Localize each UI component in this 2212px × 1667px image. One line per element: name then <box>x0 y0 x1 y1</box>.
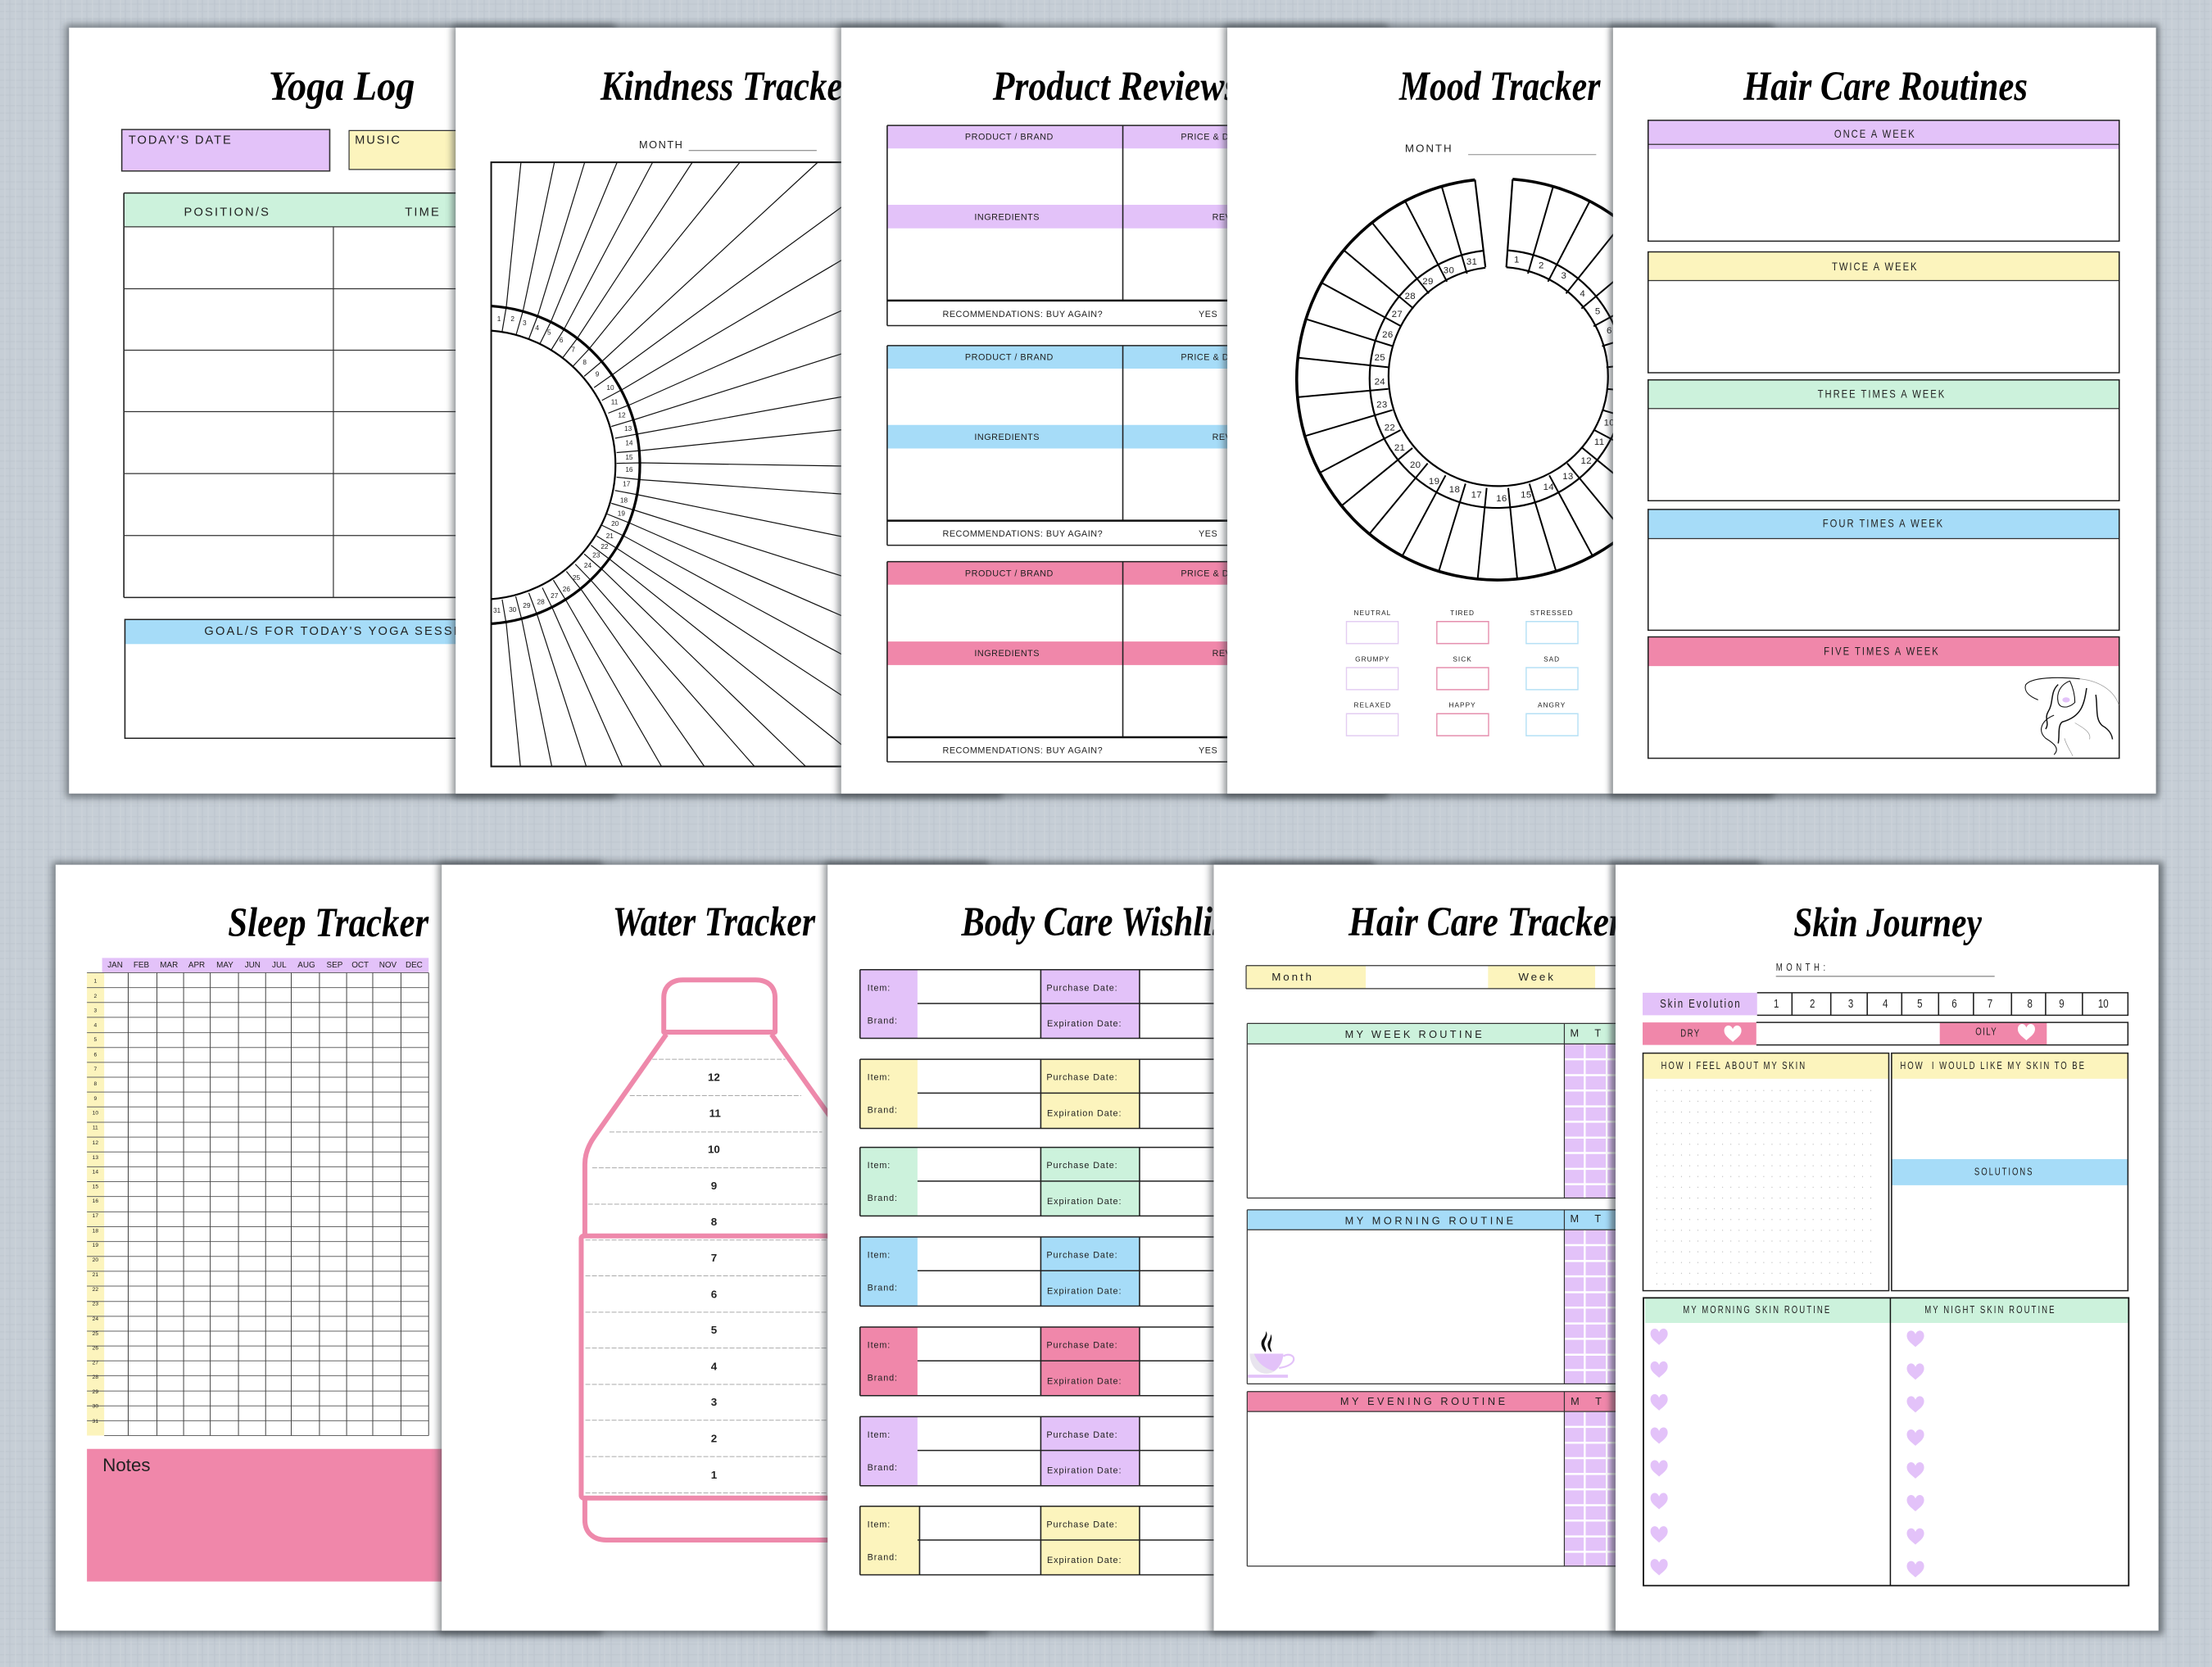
review block: pink: PRODUCT / BRAND <box>965 569 1054 579</box>
chart: monthly sleep grid: 11 <box>93 1126 98 1131</box>
routine: three times a week <box>1648 380 2119 501</box>
panel: session goals <box>125 619 553 738</box>
chart: circular mood wheel: 29 <box>1422 277 1434 287</box>
title: Sleep Tracker <box>228 900 429 946</box>
chart: day ring: 20 <box>611 520 619 528</box>
chart: monthly sleep grid: 2 <box>93 994 97 999</box>
chart: circular mood wheel: 20 <box>1410 460 1421 470</box>
wishlist row: blue: Purchase Date: <box>1046 1251 1118 1261</box>
chart: day ring: 6 <box>560 337 564 344</box>
chart: monthly sleep grid: JAN <box>107 961 123 970</box>
section: my morning routine: T <box>1594 1213 1602 1225</box>
review block: purple: REVIEW <box>1213 213 1250 223</box>
scale: skin evolution: 10 <box>2098 997 2109 1010</box>
chart: water bottle: 12 <box>708 1071 720 1083</box>
scale: skin evolution: Skin Evolution <box>1660 997 1742 1010</box>
page: Water Tracker <box>438 862 988 1635</box>
chart: day ring: 12 <box>618 411 626 419</box>
chart: day ring: 28 <box>537 599 545 605</box>
chart: day ring: 8 <box>582 359 587 366</box>
chart: day ring: 25 <box>573 574 581 582</box>
page: Mood Tracker <box>1224 25 1774 798</box>
chart: monthly sleep grid <box>87 958 428 1435</box>
review block: pink <box>887 562 1358 762</box>
wishlist row: pink: Brand: <box>868 1374 898 1384</box>
chart: monthly sleep grid: JUL <box>272 961 287 970</box>
panel: how I would like my skin to be, solutions: HOW I WOULD LIKE MY SKIN TO BE <box>1900 1061 2086 1071</box>
scale: dry to oily: DRY <box>1680 1029 1701 1040</box>
review block: blue: INGREDIENTS <box>974 433 1040 442</box>
chart: monthly sleep grid: 25 <box>93 1331 98 1337</box>
chart: monthly sleep grid: 23 <box>93 1302 98 1307</box>
chart: monthly sleep grid: 6 <box>93 1052 97 1058</box>
chart: monthly sleep grid: 7 <box>93 1067 97 1072</box>
title: Mood Tracker <box>1398 63 1601 110</box>
chart: circular mood wheel: 9 <box>1613 396 1619 406</box>
review block: blue <box>887 346 1358 546</box>
chart: circular mood wheel: 3 <box>1561 271 1566 281</box>
chart: monthly sleep grid: MAR <box>160 961 178 970</box>
review block: purple: PRICE & DATE <box>1181 133 1247 143</box>
chart: circular mood wheel: 30 <box>1444 266 1454 276</box>
chart frame <box>492 162 904 767</box>
field: music <box>349 130 558 170</box>
chart: day ring: 13 <box>624 425 632 433</box>
wishlist row: purple second: Expiration Date: <box>1047 1466 1122 1476</box>
chart: circular mood wheel: 14 <box>1543 482 1554 492</box>
chart: circular mood wheel: 4 <box>1580 289 1585 299</box>
chart: monthly sleep grid: OCT <box>351 961 369 970</box>
scale: skin evolution: 1 <box>1774 997 1779 1010</box>
routine: four times a week <box>1648 510 2119 630</box>
wishlist row: yellow second <box>860 1506 1330 1574</box>
section: my evening routine: MY EVENING ROUTINE <box>1340 1396 1508 1407</box>
scale: skin evolution: 7 <box>1988 997 1992 1010</box>
chart: day ring: 7 <box>571 346 575 353</box>
review block: purple: RECOMMENDATIONS: BUY AGAIN? <box>943 310 1103 319</box>
wishlist row: green: Expiration Date: <box>1047 1197 1122 1207</box>
routine: once a week: ONCE A WEEK <box>1834 128 1916 140</box>
chart: monthly sleep grid: NOV <box>379 961 397 970</box>
page: Sleep Tracker <box>52 862 602 1635</box>
review block: pink: REVIEW <box>1213 649 1250 659</box>
review block: pink: INGREDIENTS <box>974 649 1040 659</box>
routine: five times a week <box>1648 637 2119 759</box>
chart: circular mood wheel: 17 <box>1471 491 1482 500</box>
icons: night hearts <box>1907 1330 1924 1578</box>
chart: circular mood wheel: 12 <box>1581 456 1592 466</box>
review block: purple: PRODUCT / BRAND <box>965 133 1054 143</box>
wishlist row: purple: Expiration Date: <box>1047 1019 1122 1029</box>
section: my morning routine: MY MORNING ROUTINE <box>1345 1215 1516 1226</box>
scale: skin evolution: 3 <box>1848 997 1853 1010</box>
title: Body Care Wishlist <box>961 899 1237 945</box>
chart: monthly sleep grid: 10 <box>93 1111 98 1117</box>
wishlist row: yellow: Purchase Date: <box>1046 1073 1118 1083</box>
chart: water bottle: 1 <box>711 1469 717 1481</box>
chart: monthly sleep grid: 13 <box>93 1155 98 1161</box>
chart: day ring: 31 <box>493 607 501 614</box>
chart: day ring: 18 <box>620 497 628 505</box>
chart: day ring: 11 <box>611 399 619 406</box>
chart: water bottle: 9 <box>711 1180 717 1192</box>
chart: circular mood wheel: 25 <box>1375 353 1385 363</box>
chart: circular mood wheel: 24 <box>1375 377 1385 387</box>
title: Skin Journey <box>1793 899 1983 945</box>
legend: moods: HAPPY <box>1449 702 1476 709</box>
legend: moods: STRESSED <box>1530 609 1574 617</box>
panel: how I feel about my skin <box>1643 1053 1889 1291</box>
chart: day ring: 3 <box>523 319 527 327</box>
page: Product Reviews <box>838 25 1388 798</box>
wishlist row: purple: Brand: <box>868 1016 898 1026</box>
wishlist row: pink: Expiration Date: <box>1047 1376 1122 1386</box>
title: Hair Care Tracker <box>1348 899 1624 945</box>
icon: woman with hat line art <box>2025 677 2119 756</box>
wishlist row: purple second: Purchase Date: <box>1046 1430 1118 1440</box>
panel: notes <box>87 1449 557 1582</box>
routine: four times a week: FOUR TIMES A WEEK <box>1823 518 1944 530</box>
chart: water bottle: 3 <box>711 1396 717 1408</box>
legend: moods: SICK <box>1453 656 1472 663</box>
chart: monthly sleep grid: 27 <box>93 1361 98 1366</box>
chart: monthly sleep grid: 14 <box>93 1170 98 1175</box>
section: my evening routine: M <box>1571 1396 1580 1407</box>
table: positions and time <box>124 193 552 597</box>
chart: day ring: 9 <box>596 370 600 378</box>
month field: MONTH <box>1405 143 1453 155</box>
review block: purple: INGREDIENTS <box>974 213 1040 223</box>
chart: day ring <box>492 306 640 623</box>
section: my morning routine <box>1247 1210 1681 1384</box>
chart: day ring: 23 <box>592 552 601 559</box>
scale: skin evolution: 8 <box>2028 997 2033 1010</box>
chart: monthly sleep grid: 31 <box>93 1419 98 1425</box>
chart: water bottle: 2 <box>711 1433 717 1445</box>
legend: moods <box>1346 609 1578 736</box>
panel: skin routines: MY NIGHT SKIN ROUTINE <box>1924 1305 2056 1316</box>
wishlist row: purple second: Brand: <box>868 1463 898 1473</box>
page: Body Care Wishlist <box>824 862 1374 1635</box>
field: today's date <box>122 129 329 171</box>
review block: pink: YES <box>1199 745 1217 755</box>
section: my week routine <box>1247 1023 1681 1198</box>
chart: monthly sleep grid: 9 <box>93 1096 97 1102</box>
chart: day ring: 26 <box>563 586 570 593</box>
icon: steaming cup <box>1248 1331 1294 1378</box>
panel: how I feel about my skin: HOW I FEEL ABOUT MY SKIN <box>1661 1061 1806 1071</box>
chart: water bottle: 8 <box>711 1216 717 1228</box>
chart: day ring: 27 <box>551 592 559 600</box>
wishlist row: blue <box>860 1237 1330 1306</box>
month and week bar <box>1246 966 1718 989</box>
chart: monthly sleep grid: 16 <box>93 1198 98 1204</box>
wishlist row: purple: Purchase Date: <box>1046 983 1118 993</box>
wishlist row: yellow: Expiration Date: <box>1047 1109 1122 1118</box>
review block: pink: PRICE & DATE <box>1181 569 1247 579</box>
chart: monthly sleep grid: 19 <box>93 1243 98 1248</box>
wishlist row: blue: Expiration Date: <box>1047 1286 1122 1296</box>
chart: day ring: 19 <box>618 510 625 517</box>
chart: circular mood wheel: 5 <box>1595 307 1601 317</box>
wishlist row: pink <box>860 1327 1330 1396</box>
wishlist row: yellow second: Expiration Date: <box>1047 1556 1122 1565</box>
chart: water bottle: 4 <box>711 1361 718 1372</box>
chart: monthly sleep grid: 26 <box>93 1346 98 1351</box>
chart: circular mood wheel <box>1297 179 1698 580</box>
chart: day ring: 5 <box>547 329 551 337</box>
wishlist row: purple <box>860 970 1330 1039</box>
chart: circular mood wheel: 27 <box>1392 310 1403 319</box>
chart: monthly sleep grid: 4 <box>93 1023 97 1029</box>
routine: twice a week <box>1648 252 2119 373</box>
chart: circular mood wheel: 28 <box>1405 292 1416 301</box>
legend: moods: TIRED <box>1450 609 1475 617</box>
chart: day ring: 15 <box>625 454 633 461</box>
wishlist row: green <box>860 1148 1330 1216</box>
chart: monthly sleep grid: 17 <box>93 1213 98 1219</box>
chart: circular mood wheel: 15 <box>1521 491 1532 500</box>
chart: circular mood wheel: 22 <box>1385 424 1395 433</box>
chart: day ring: 4 <box>535 324 539 332</box>
scale: skin evolution: 6 <box>1951 997 1957 1010</box>
chart: circular mood wheel: 6 <box>1607 326 1612 336</box>
table: positions and time: POSITION/S <box>184 206 270 220</box>
chart: monthly sleep grid: 29 <box>93 1389 98 1395</box>
scale: skin evolution: 9 <box>2059 997 2065 1010</box>
wishlist row: blue: Item: <box>868 1251 891 1261</box>
chart: monthly sleep grid: SEP <box>327 961 342 970</box>
panel: session goals: GOAL/S FOR TODAY'S YOGA SESSION <box>204 625 480 638</box>
chart: monthly sleep grid: 22 <box>93 1287 98 1293</box>
review block: blue: REVIEW <box>1213 433 1250 442</box>
review block: purple: YES <box>1199 310 1217 319</box>
title: Kindness Tracker <box>600 63 857 110</box>
chart: monthly sleep grid: 28 <box>93 1375 98 1380</box>
chart: monthly sleep grid: 12 <box>93 1140 98 1146</box>
routine: once a week <box>1648 120 2119 241</box>
wishlist row: yellow second: Brand: <box>868 1552 898 1562</box>
page: Skin Journey <box>1611 862 2164 1635</box>
scale: dry to oily <box>1643 1022 2128 1045</box>
wishlist row: green: Item: <box>868 1161 891 1171</box>
legend: moods: SAD <box>1543 656 1560 663</box>
panel: skin routines: MY MORNING SKIN ROUTINE <box>1683 1305 1831 1316</box>
chart: sunburst day rays <box>502 162 864 767</box>
title: Water Tracker <box>613 899 816 945</box>
page: Kindness Tracker <box>452 25 1002 798</box>
month field: MONTH: <box>1776 963 1829 973</box>
chart: monthly sleep grid: 15 <box>93 1185 98 1190</box>
panel: skin routines <box>1643 1298 2128 1586</box>
wishlist row: yellow second: Purchase Date: <box>1046 1520 1118 1529</box>
wishlist row: yellow <box>860 1059 1330 1129</box>
chart: circular mood wheel: 10 <box>1604 418 1615 428</box>
review block: blue: RECOMMENDATIONS: BUY AGAIN? <box>943 529 1103 539</box>
chart: day ring: 1 <box>497 315 501 323</box>
section: my week routine: MY WEEK ROUTINE <box>1345 1029 1484 1040</box>
page: Hair Care Routines <box>1610 25 2160 798</box>
chart: monthly sleep grid: 30 <box>93 1404 98 1410</box>
wishlist row: purple second <box>860 1416 1330 1486</box>
chart: day ring: 16 <box>625 466 633 473</box>
wishlist row: yellow: Brand: <box>868 1106 898 1116</box>
wishlist row: purple second: Item: <box>868 1430 891 1440</box>
review block: purple <box>887 125 1358 326</box>
chart: monthly sleep grid: 21 <box>93 1272 98 1278</box>
field: music: MUSIC <box>355 134 401 147</box>
chart: day ring: 30 <box>509 606 517 614</box>
section: my evening routine <box>1247 1392 1681 1566</box>
chart: day ring: 14 <box>625 440 633 447</box>
chart: monthly sleep grid: MAY <box>216 961 233 970</box>
field: today's date: TODAY'S DATE <box>129 134 233 147</box>
routine: three times a week: THREE TIMES A WEEK <box>1818 388 1946 401</box>
chart: circular mood wheel: 23 <box>1376 401 1388 410</box>
chart: monthly sleep grid: DEC <box>406 961 423 970</box>
chart: monthly sleep grid: 5 <box>93 1037 97 1043</box>
review block: blue: PRICE & DATE <box>1181 352 1247 362</box>
scale: skin evolution: 4 <box>1883 997 1888 1010</box>
chart: circular mood wheel: 16 <box>1496 494 1507 504</box>
section: my evening routine: T <box>1595 1396 1602 1407</box>
legend: moods: RELAXED <box>1354 702 1391 709</box>
month and week bar: Month <box>1271 971 1314 983</box>
chart: monthly sleep grid: JUN <box>245 961 261 970</box>
chart: water bottle: 11 <box>709 1108 721 1120</box>
icon: lips <box>2062 697 2070 703</box>
chart: monthly sleep grid: 3 <box>93 1008 97 1014</box>
wishlist row: blue: Brand: <box>868 1284 898 1293</box>
chart: circular mood wheel: 26 <box>1382 330 1394 340</box>
month and week bar: Week <box>1518 971 1556 983</box>
scale: dry to oily: OILY <box>1975 1027 1997 1038</box>
chart: monthly sleep grid: APR <box>188 961 205 970</box>
chart: water bottle: 5 <box>711 1324 717 1336</box>
panel: notes: Notes <box>102 1455 151 1475</box>
chart: circular mood wheel: 7 <box>1613 351 1619 360</box>
chart: monthly sleep grid: 20 <box>93 1257 98 1263</box>
wishlist row: yellow second: Item: <box>868 1520 891 1529</box>
wishlist row: yellow: Item: <box>868 1073 891 1083</box>
wishlist row: green: Brand: <box>868 1194 898 1203</box>
section: my morning routine: M <box>1570 1213 1579 1225</box>
chart: monthly sleep grid: 1 <box>93 978 97 984</box>
chart: day ring: 29 <box>523 602 531 609</box>
chart: day ring: 22 <box>601 543 609 550</box>
chart: circular mood wheel: 21 <box>1394 443 1405 453</box>
scale: skin evolution <box>1643 993 2128 1015</box>
chart: day ring: 17 <box>623 481 631 488</box>
chart: circular mood wheel: 11 <box>1594 437 1604 447</box>
page: Hair Care Tracker <box>1211 862 1761 1635</box>
wishlist row: pink: Item: <box>868 1341 891 1351</box>
title: Hair Care Routines <box>1743 63 2028 110</box>
chart: circular mood wheel: 13 <box>1562 472 1574 482</box>
routine: five times a week: FIVE TIMES A WEEK <box>1824 645 1940 658</box>
review block: blue: PRODUCT / BRAND <box>965 352 1054 362</box>
scale: skin evolution: 5 <box>1917 997 1922 1010</box>
chart: day ring: 10 <box>606 384 614 392</box>
chart: circular mood wheel: 8 <box>1616 374 1621 383</box>
title: Product Reviews <box>992 63 1238 110</box>
chart: monthly sleep grid: 18 <box>93 1228 98 1234</box>
panel: how I would like my skin to be, solutions <box>1892 1053 2128 1291</box>
icons: morning hearts <box>1651 1329 1668 1575</box>
chart: water bottle: 10 <box>708 1144 720 1155</box>
panel: how I would like my skin to be, solutions: SOLUTIONS <box>1974 1166 2033 1178</box>
chart: circular mood wheel: 31 <box>1466 257 1477 267</box>
chart: day ring: 24 <box>584 562 592 569</box>
chart: monthly sleep grid: 8 <box>93 1081 97 1087</box>
chart: monthly sleep grid: FEB <box>134 961 149 970</box>
chart: day ring: 2 <box>510 315 514 323</box>
legend: moods: GRUMPY <box>1355 656 1390 663</box>
chart: monthly sleep grid: AUG <box>297 961 315 970</box>
routine: twice a week: TWICE A WEEK <box>1832 260 1919 273</box>
table: positions and time: TIME <box>405 206 441 220</box>
chart: circular mood wheel: 18 <box>1449 485 1460 495</box>
chart: circular mood wheel: 19 <box>1429 477 1439 487</box>
wishlist row: green: Purchase Date: <box>1046 1161 1118 1171</box>
wishlist row: purple: Item: <box>868 983 891 993</box>
chart: circular mood wheel: 1 <box>1514 256 1520 265</box>
chart: day ring: 21 <box>606 532 614 540</box>
chart: circular mood wheel: 2 <box>1539 261 1544 270</box>
chart: monthly sleep grid: 24 <box>93 1316 98 1322</box>
section: my week routine: T <box>1594 1028 1602 1040</box>
chart: water bottle: 6 <box>711 1288 717 1300</box>
review block: blue: YES <box>1199 529 1217 539</box>
month field: MONTH <box>639 139 683 151</box>
wishlist row: pink: Purchase Date: <box>1046 1341 1118 1351</box>
legend: moods: ANGRY <box>1538 702 1566 709</box>
chart: water bottle: 7 <box>711 1252 717 1264</box>
legend: moods: NEUTRAL <box>1354 609 1391 617</box>
section: my week routine: M <box>1570 1028 1579 1040</box>
page: Yoga Log <box>66 25 615 798</box>
chart: water bottle <box>581 980 857 1540</box>
title: Yoga Log <box>269 63 415 110</box>
review block: pink: RECOMMENDATIONS: BUY AGAIN? <box>943 745 1103 755</box>
scale: skin evolution: 2 <box>1810 997 1815 1010</box>
